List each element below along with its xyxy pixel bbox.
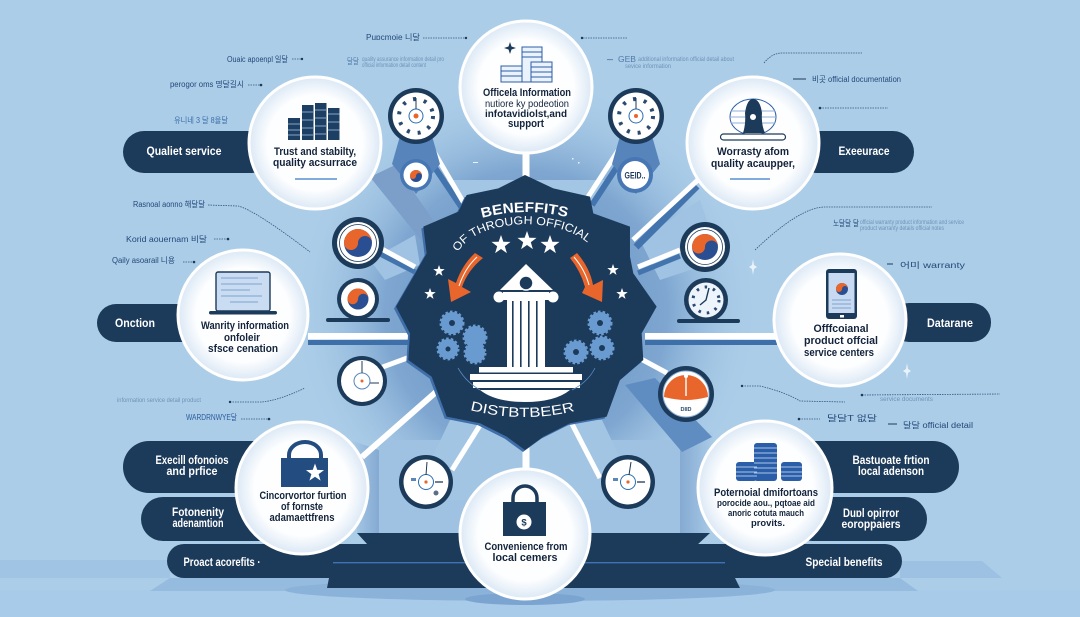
- pill: quality service: Qualiet service: [146, 146, 222, 158]
- text: potential: anoric cotuta mauch: [728, 508, 804, 519]
- panel: trust and stability: [249, 77, 381, 209]
- text: trust and stability: [273, 146, 357, 169]
- icon: padlock bag with star: [281, 442, 328, 487]
- panel: warranty information: [178, 250, 308, 380]
- text: official information: [483, 87, 571, 130]
- annotations: official warranty product information and service: [860, 220, 965, 226]
- annotations: information service detail product: [117, 398, 201, 404]
- annotations: service documents: [880, 397, 933, 403]
- text: warranty: [711, 146, 795, 170]
- annotations: official information detail content: [362, 63, 426, 69]
- text: warranty information: sfsce cenation: [208, 343, 278, 355]
- text: convertor: of fornste: [281, 501, 323, 513]
- arrow: right orange: [570, 253, 603, 302]
- annotations: WARDRNWYE달: [186, 413, 238, 422]
- icon: base arc lines: [458, 368, 595, 390]
- icon: gauge bottom right: [601, 455, 655, 509]
- icon: clock right: [677, 278, 740, 323]
- text: trust and stability: quality acsurrace: [273, 157, 357, 169]
- badge shadow layer: [394, 177, 655, 452]
- panel: convertor: [236, 422, 368, 554]
- icon: gauge bottom left: [399, 455, 453, 509]
- badge title arcs: BENEFFITS: [480, 202, 568, 218]
- annotations: 달달 official detail: [903, 421, 973, 430]
- annotations: Qaily asoarail 니용: [112, 255, 175, 265]
- pill: fotonenity adenamtion: Fotonenity: [172, 507, 225, 519]
- text: warranty: Worrasty afom: [717, 146, 789, 158]
- side pills left: [97, 131, 407, 578]
- pill: datarane: Datarane: [927, 318, 973, 330]
- pill: exact offerings and price: [123, 441, 283, 493]
- connector rays: [308, 143, 777, 478]
- underline: [295, 178, 337, 180]
- panel: official product: [774, 254, 906, 386]
- central badge: [394, 175, 657, 452]
- text: official information: infotavidiolst,and: [485, 109, 567, 120]
- icon: laptop: [209, 272, 277, 314]
- pill: datarane: [890, 303, 991, 342]
- icon: right gears: [565, 312, 613, 363]
- annotations: Korid aouernam 비달: [126, 235, 208, 244]
- pill: dupl opirror eoroppaiers: [790, 497, 927, 541]
- pill: fotonenity adenamtion: [141, 497, 286, 541]
- icon: clock gauge left: [337, 356, 387, 406]
- text: potential: Poternoial dmifortoans: [714, 487, 818, 499]
- icon: sparkle: [504, 42, 516, 54]
- icon: top-right gauge: [608, 88, 664, 194]
- pill: special benefits: [665, 544, 902, 578]
- icon: orange gauge right: [658, 366, 714, 422]
- icon: coin stacks: [736, 443, 802, 481]
- annotations: 유니네 3 달 8율달: [174, 115, 229, 125]
- text: convenience: local cemers: [492, 552, 558, 564]
- text: official product: Offfcoianal: [814, 323, 868, 335]
- text: warranty information: Wanrity information: [201, 320, 289, 332]
- icon: shopping bag with coin: $: [521, 518, 527, 528]
- annotations: Rasnoal aonno 해달달: [133, 199, 206, 209]
- text: warranty: quality acaupper,: [711, 158, 795, 170]
- pill: special benefits: Special benefits: [806, 557, 882, 569]
- text: official product: [804, 323, 878, 359]
- floor shapes: [0, 560, 1080, 617]
- pill: dupl opirror eoroppaiers: Duɒl opirror: [843, 508, 899, 520]
- annotations: quality assurance information detail pro: [362, 57, 445, 63]
- pill: bastucate from local adenson: [790, 441, 959, 493]
- text: convertor: adamaettfrens: [270, 512, 334, 524]
- annotations: Puɒcmoie 니달: [366, 32, 421, 42]
- pill: quality service: [123, 131, 273, 173]
- icon: orange gauge right: DIID: [680, 407, 692, 413]
- pill: fotonenity adenamtion: adenamtion: [172, 518, 224, 530]
- text: convertor: Cincorvortor furtion: [260, 490, 347, 502]
- badge body: [396, 175, 657, 450]
- text: convenience: [484, 541, 568, 564]
- annotations: 노달달 달: [833, 219, 860, 228]
- badge title arcs: [453, 202, 589, 417]
- panel: warranty: [687, 77, 819, 209]
- panel: potential: [698, 421, 832, 555]
- pill: exeurance: Exeeurace: [838, 146, 890, 158]
- annotations: 달달: [347, 57, 360, 66]
- pill: exact offerings and price: and prfice: [166, 466, 218, 478]
- text: official product: service centers: [804, 347, 874, 359]
- text: convertor: [260, 490, 347, 524]
- side pills right: [665, 131, 991, 578]
- pill: bastucate from local adenson: local adenson: [858, 466, 924, 478]
- annotations: product warranty details official notes: [860, 226, 944, 232]
- icon: phone: [826, 269, 857, 319]
- icon: flag gauge left upper: [332, 217, 384, 269]
- text: convenience: Convenience from: [484, 541, 568, 553]
- sparkles: [473, 158, 911, 379]
- icon: bar stacks: [288, 103, 340, 140]
- text: official information: nutiore ky podeotion: [485, 99, 569, 110]
- icon: top-left gauge: [388, 88, 444, 194]
- text: potential: porocide aou., pqtoae aid: [717, 498, 815, 509]
- text: trust and stability: Trust and stabilty,: [274, 146, 356, 158]
- icon: document stacks: [501, 47, 552, 82]
- text: warranty information: onfoleir: [224, 332, 261, 344]
- dark base behind bottom pills: [327, 533, 740, 588]
- annotations: Ouaic apoenpl 일달: [227, 55, 289, 64]
- pill: bastucate from local adenson: Bastuoate frtion: [852, 455, 930, 467]
- annotations: GEB: [618, 55, 636, 64]
- arrow: left orange: [448, 253, 483, 302]
- text: official information: support: [508, 118, 544, 130]
- badge title arcs: OF THROUGH OFFICIAL: [453, 216, 589, 250]
- base highlight line: [333, 562, 725, 563]
- underline: [730, 178, 770, 180]
- icon: small medallion GEID: [617, 157, 653, 193]
- central fan backdrop: [291, 77, 761, 558]
- annotations: –: [607, 55, 614, 64]
- pill: exeurance: [795, 131, 914, 173]
- icon: flag gauge right upper: [680, 222, 730, 272]
- icon: stars: [424, 231, 628, 299]
- icon: left gears: [438, 312, 486, 363]
- text: official information: Officela Information: [483, 87, 571, 99]
- icon: pillar: [470, 264, 582, 402]
- icon: small medallion GEID: GEID..: [624, 170, 646, 182]
- icon: flag gauge left lower: [326, 278, 390, 322]
- annotations: 어미 warranty: [900, 260, 965, 270]
- annotations: additional information official detail about: [638, 57, 734, 63]
- pill: onction: [97, 304, 207, 342]
- text: potential: provits.: [751, 518, 785, 529]
- pill: dupl opirror eoroppaiers: eoroppaiers: [842, 519, 900, 531]
- icon: small flag medallion left: [400, 159, 432, 191]
- text: potential: [714, 487, 818, 529]
- panel: convenience: [460, 469, 590, 599]
- pill: product acorefits: [167, 544, 407, 578]
- annotations: [112, 32, 1000, 430]
- annotations: 비곳 official documentation: [812, 75, 901, 84]
- badge title arcs: DISTBTBEER: [471, 401, 574, 417]
- text: warranty information: [201, 320, 289, 355]
- text: official product: product offcial: [804, 335, 878, 347]
- pill: product acorefits: Proact acorefits ·: [184, 557, 260, 569]
- annotations: perogor oms 명달길시: [170, 79, 244, 89]
- icon: globe and seal: [720, 99, 786, 140]
- pill: exact offerings and price: Execill ofonoios: [156, 455, 228, 467]
- annotations: 달달T 없달: [827, 414, 878, 423]
- panel: official information: [460, 21, 592, 153]
- pill: onction: Onction: [115, 318, 155, 330]
- annotations: sevice information: [625, 64, 671, 70]
